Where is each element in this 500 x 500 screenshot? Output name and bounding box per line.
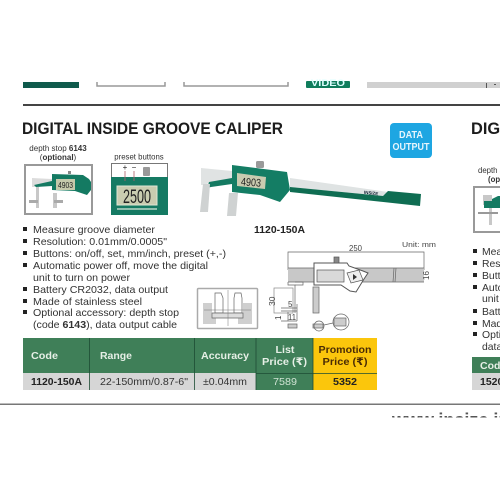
- feature list: [23, 225, 226, 331]
- caption: preset buttons: preset buttons: [114, 152, 164, 162]
- price table: 22-150mm/0.87-6": [100, 376, 188, 388]
- caption: depth stop: [29, 144, 87, 162]
- price table: Code: [31, 350, 58, 362]
- caption: depth stop: (optional): [40, 153, 77, 162]
- price table: Range: [100, 350, 132, 362]
- caption: depth stop: depth stop 6143: [29, 144, 87, 153]
- top cropped strip from previous section: [23, 78, 500, 88]
- price table: [23, 338, 377, 390]
- panel: preset buttons photo: [111, 163, 168, 215]
- title: DIGITAL INSIDE GROOVE CALIPER: [22, 120, 283, 138]
- top cropped strip from previous section: VIDEO: [311, 78, 345, 88]
- dimension labels: 11: [288, 313, 297, 322]
- price table: 1120-150A: [31, 376, 82, 388]
- main caliper photo: INSIZE: [364, 190, 379, 196]
- dimension labels: 16: [422, 271, 431, 280]
- price table: Accuracy: [201, 350, 249, 362]
- dimension labels: [267, 240, 436, 322]
- price table: 7589: [273, 376, 297, 388]
- feature list: Automatic power off, move the digital: [33, 261, 208, 272]
- feature list: Made of stainless steel: [33, 297, 142, 308]
- price table: Price (₹): [262, 356, 307, 368]
- badge: data output: [390, 123, 432, 158]
- feature list: unit to turn on power: [33, 273, 131, 284]
- feature list: (code 6143), data output cable: [33, 320, 177, 331]
- price table: Price (₹): [322, 356, 368, 368]
- model label: 1120-150A: [254, 225, 305, 236]
- main caliper photo: 4903: [241, 176, 261, 190]
- right cropped column: [471, 120, 500, 390]
- technical drawing: dimensions: [274, 252, 424, 331]
- badge: data output: DATA: [399, 130, 423, 141]
- badge: data output: OUTPUT: [392, 142, 430, 153]
- feature list: Optional accessory: depth stop: [33, 308, 179, 319]
- feature list: Resolution: 0.01mm/0.0005": [33, 237, 167, 248]
- panel: preset buttons photo: 2500: [123, 187, 151, 208]
- panel: depth stop photo: [25, 165, 92, 214]
- price table: 5352: [333, 376, 357, 388]
- feature list: Battery CR2032, data output: [33, 285, 168, 296]
- panel: preset buttons photo: +: [123, 163, 128, 172]
- dimension labels: 1: [274, 315, 283, 320]
- price table: ±0.04mm: [203, 376, 247, 388]
- price table: Promotion: [318, 344, 372, 356]
- dimension labels: 250: [349, 244, 363, 253]
- footer website text, cropped: [380, 410, 500, 438]
- dimension labels: Unit: mm: [402, 240, 436, 249]
- feature list: Buttons: on/off, set, mm/inch, preset (+,-): [33, 249, 226, 260]
- panel: preset buttons photo: −: [132, 163, 137, 172]
- dimension labels: 5: [288, 300, 293, 309]
- panel: depth stop photo: 4903: [58, 181, 73, 190]
- main caliper photo: [200, 161, 421, 216]
- technical drawing: groove detail: [198, 288, 258, 328]
- feature list: Measure groove diameter: [33, 225, 156, 236]
- dimension labels: 30: [267, 296, 277, 306]
- price table: List: [276, 344, 295, 356]
